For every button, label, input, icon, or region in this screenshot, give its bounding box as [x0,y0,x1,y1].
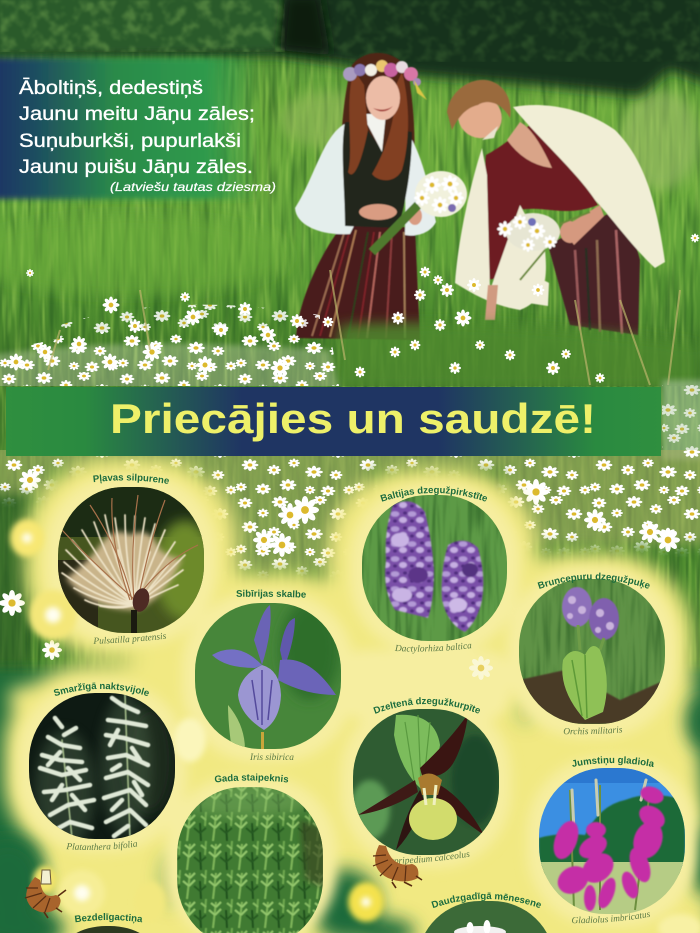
photo: Orchis militaris [519,579,665,725]
name: Bruņcepuru dzegužpuķe: Bruņcepuru dzegužpuķe [538,572,650,589]
name: Bezdelīgactiņa: Bezdelīgactiņa [74,913,142,924]
photo: Dactylorhiza baltica [362,495,507,641]
lower meadow with daisies [0,380,700,933]
photo: Iris sibirica [195,600,341,752]
name: Dzeltenā dzegužkurpīte: Dzeltenā dzegužkurpīte [373,697,480,714]
grass field [0,40,700,387]
wreath [343,60,427,100]
banner band [6,387,661,456]
poem background [0,58,260,199]
latin: Iris sibirica: Iris sibirica [249,753,294,763]
blouse sleeves [295,122,362,234]
name: Gada staipeknis: Gada staipeknis [214,774,288,782]
photo: Gladiolus imbricatus [539,768,685,914]
latin: Platanthera bifolia: Platanthera bifolia [66,840,138,850]
name: Smaržīgā naktsvijole: Smaržīgā naktsvijole [54,682,149,696]
poem text: Āboltiņš, dedestiņš [19,76,203,99]
name: Jumstiņu gladiola: Jumstiņu gladiola [572,756,654,767]
skirt [548,205,640,335]
poem text: Jaunu puišu Jāņu zāles. [19,156,253,178]
hands [359,204,397,220]
name: Sibīrijas skalbe: Sibīrijas skalbe [236,590,306,599]
blouse [485,125,598,280]
panel: poem [0,58,276,199]
vest [343,122,412,228]
photo: Cypripedium calceolus [350,709,499,855]
poem text [19,76,276,194]
arm [562,205,604,245]
latin: Cypripedium calceolus: Cypripedium calceolus [393,852,470,865]
photo: Bezdelīgactiņa [76,926,140,933]
photo: Daudzgadīgā mēnesene [425,901,547,933]
dark patches in glow [0,696,700,933]
photo: Lycopodium annotinum [177,782,330,933]
latin: Orchis militaris: Orchis militaris [564,726,622,734]
photo: woman leaning with shawl [447,80,665,335]
scientific names [66,632,650,924]
dark forest strip [0,0,700,96]
small yellow flower [469,656,493,680]
yellow glow behind plant photos [0,458,700,933]
hair [348,70,368,174]
icon: beetle near Cypripedium [373,845,422,888]
photo: Pulsatilla pratensis [58,487,215,634]
shawl [513,105,665,268]
banner: title [6,387,661,456]
bouquet [372,171,467,252]
poem text: Suņuburkši, pupurlakši [19,130,241,152]
name: Daudzgadīgā mēnesene: Daudzgadīgā mēnesene [431,892,541,908]
poem text: (Latviešu tautas dziesma) [110,180,276,194]
plant names [54,474,654,924]
foreground daisies in meadow [0,234,700,392]
glow orbs [10,519,700,933]
title text: Priecājies un saudzē! [110,395,596,442]
name: Baltijas dzegužpirkstīte: Baltijas dzegužpirkstīte [380,486,487,502]
head [451,89,509,145]
poem text: Jaunu meitu Jāņu zāles; [19,103,255,125]
name: Pļavas silpurene: Pļavas silpurene [93,474,169,484]
latin: Gladiolus imbricatus: Gladiolus imbricatus [572,912,650,924]
skirt [296,222,420,340]
latin: Dactylorhiza baltica: Dactylorhiza baltica [394,642,472,654]
icon: beetle with lantern [25,870,66,918]
face [366,76,400,120]
photo: woman with flower wreath [295,53,467,340]
bouquet [497,212,590,280]
dark green bottom [0,670,700,933]
photo: Platanthera bifolia [29,693,175,850]
latin: Pulsatilla pratensis: Pulsatilla pratensis [94,632,166,644]
